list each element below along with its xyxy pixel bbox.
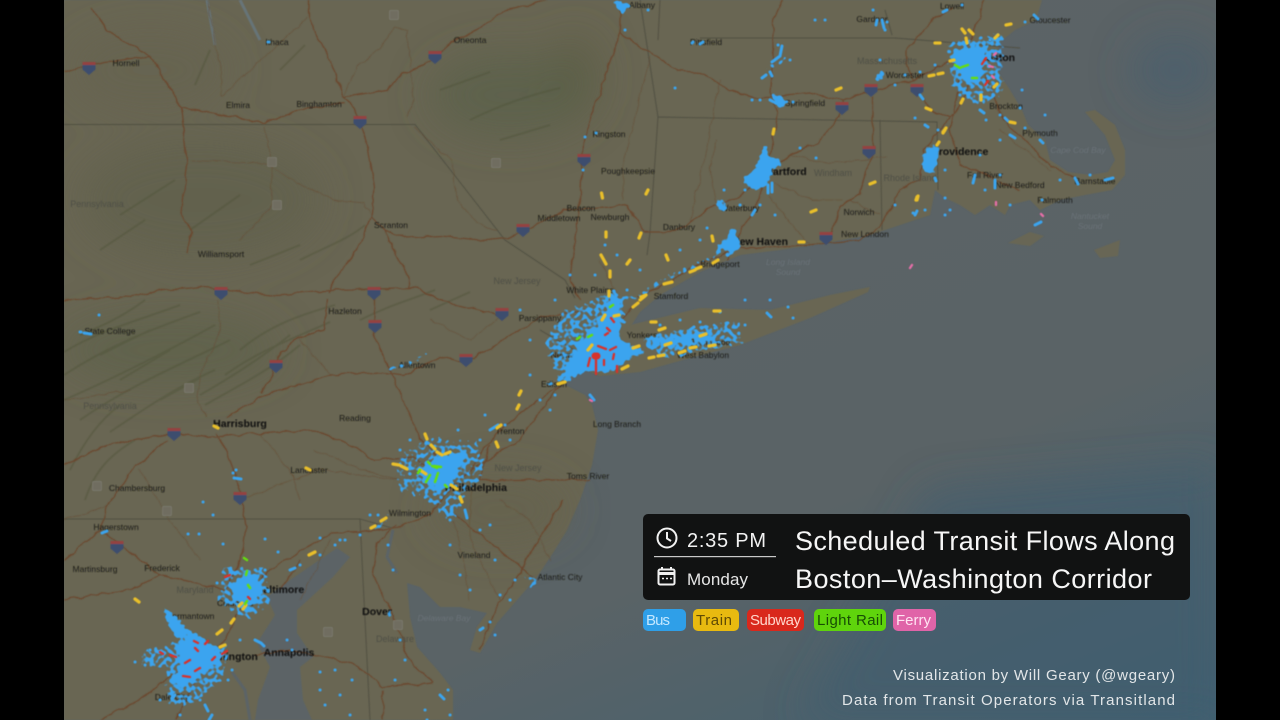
state borders — [64, 0, 1020, 720]
day of week: Monday — [687, 570, 748, 589]
map place labels: New Jersey — [494, 463, 542, 473]
map place labels: Hazleton — [328, 306, 362, 316]
bus: New York metro core — [567, 287, 660, 380]
map place labels: Scranton — [374, 220, 408, 230]
map place labels: Philadelphia — [445, 482, 507, 494]
major highways — [64, 0, 1075, 720]
map place labels: Albany — [629, 0, 656, 10]
map place labels: Plymouth — [1022, 128, 1058, 138]
map place labels: State College — [84, 326, 136, 336]
map place labels: Atlantic City — [538, 572, 583, 582]
title: Boston–Washington Corridor — [795, 564, 1152, 594]
bus: Baltimore — [233, 573, 263, 610]
map place labels: New Bedford — [995, 180, 1045, 190]
Martha's Vineyard and Nantucket — [1008, 232, 1120, 258]
map place labels: Kingston — [592, 129, 626, 139]
credits — [842, 667, 1175, 709]
map place labels: Chambersburg — [109, 483, 165, 493]
map place labels: Binghamton — [296, 99, 342, 109]
map place labels: Hornell — [113, 58, 140, 68]
map place labels: Ithaca — [265, 37, 289, 47]
map place labels: Massachusetts — [857, 56, 918, 66]
map place labels: Newburgh — [591, 212, 630, 222]
bus: Washington — [175, 630, 220, 687]
map place labels: New Jersey — [493, 276, 541, 286]
map place labels: Beacon — [567, 203, 596, 213]
map place labels: Delaware Bay — [418, 613, 471, 623]
map place labels: Martinsburg — [73, 564, 118, 574]
map place labels: Newark — [551, 350, 580, 360]
legend — [643, 609, 936, 631]
legend: bus — [643, 609, 686, 631]
icon: calendar — [658, 567, 675, 584]
map place labels — [70, 0, 1116, 702]
title: Scheduled Transit Flows Along — [795, 526, 1175, 556]
legend: train: Train — [696, 612, 732, 629]
map place labels: Barnstable — [1075, 176, 1116, 186]
map place labels: Pennsylvania — [70, 199, 124, 209]
map place labels: Rhode Island — [883, 173, 937, 183]
train flows — [135, 24, 1015, 647]
map place labels: Maryland — [176, 585, 214, 595]
subway flows — [160, 58, 988, 677]
map place labels: Providence — [932, 146, 988, 158]
map place labels: Cape Cod Bay — [1050, 145, 1106, 155]
ferry flows — [590, 53, 1043, 401]
divider — [654, 556, 776, 557]
map place labels: Toms River — [567, 471, 609, 481]
map place labels: Pennsylvania — [83, 401, 137, 411]
terrain shading — [123, 42, 590, 360]
map place labels: Middletown — [538, 213, 581, 223]
map place labels: Long Branch — [593, 419, 641, 429]
map place labels: Gloucester — [1029, 15, 1071, 25]
map place labels: West Babylon — [677, 350, 729, 360]
map place labels: Dover — [362, 606, 392, 618]
bus: Albany — [612, 0, 631, 14]
map place labels: Baltimore — [256, 584, 304, 596]
map place labels: Edison — [541, 379, 567, 389]
map place labels: Harrisburg — [213, 418, 267, 430]
map place labels: Norwich — [844, 207, 875, 217]
map place labels: Windham — [814, 168, 852, 178]
map place labels: Williamsport — [198, 249, 245, 259]
bus: Providence — [922, 143, 940, 173]
legend: ferry — [893, 609, 936, 631]
map place labels: White Plains — [566, 285, 614, 295]
map place labels: Sound — [1078, 221, 1103, 231]
map place labels: Frederick — [144, 563, 180, 573]
bus: Philadelphia — [420, 453, 467, 490]
bus: Waterbury — [716, 199, 728, 212]
panel background — [643, 514, 1190, 600]
interstate and route shields — [82, 10, 924, 636]
map place labels: Vineland — [458, 550, 491, 560]
map place labels: Hartford — [765, 166, 807, 178]
road network — [64, 0, 1075, 720]
icon: clock — [658, 528, 676, 548]
legend: bus: Bus — [646, 612, 670, 629]
bus: New Haven — [716, 228, 742, 258]
map place labels: Lowell — [940, 1, 964, 11]
time: 2:35 PM — [687, 530, 766, 552]
map place labels: Nantucket — [1071, 211, 1110, 221]
map place labels: Trenton — [496, 426, 525, 436]
bus: Hartford — [743, 145, 782, 191]
map place labels: Boston — [979, 52, 1015, 64]
map place labels: Columbia — [217, 598, 253, 608]
map place labels: Dale City — [155, 692, 190, 702]
bus: Connecticut and Long Island corridors — [370, 57, 787, 620]
map place labels: Bridgeport — [700, 259, 740, 269]
legend: light rail: Light Rail — [817, 612, 883, 629]
legend: ferry: Ferry — [896, 612, 932, 629]
map place labels: Fall River — [967, 170, 1003, 180]
map place labels: Worcester — [886, 70, 924, 80]
map place labels: Annapolis — [264, 647, 315, 659]
legend: subway — [747, 609, 804, 631]
light rail flows — [244, 65, 977, 604]
map place labels: Brockton — [989, 101, 1023, 111]
map place labels: Allentown — [399, 360, 436, 370]
bus: Worcester — [874, 70, 885, 82]
map place labels: Lancaster — [290, 465, 328, 475]
legend: subway: Subway — [750, 612, 802, 629]
map place labels: Waterbury — [721, 203, 760, 213]
map place labels: Springfield — [785, 98, 825, 108]
map place labels: New London — [841, 229, 889, 239]
credits: Data from Transit Operators via Transitland — [842, 692, 1175, 709]
Chesapeake Bay and rivers — [207, 0, 397, 720]
deep water shading — [850, 42, 1208, 684]
map place labels: Stamford — [654, 291, 689, 301]
map place labels: New Haven — [732, 236, 788, 248]
map place labels: Wilmington — [389, 508, 431, 518]
Appalachian ridges — [64, 45, 560, 500]
bus: Springfield — [771, 93, 789, 108]
map place labels: Danbury — [663, 222, 696, 232]
title — [795, 526, 1175, 594]
map place labels: Oneonta — [454, 35, 487, 45]
map place labels: Washington — [198, 651, 258, 663]
title panel — [643, 514, 1190, 600]
map place labels: Falmouth — [1037, 195, 1073, 205]
map place labels: Gardner — [856, 14, 888, 24]
map place labels: Reading — [339, 413, 371, 423]
legend: train — [693, 609, 739, 631]
map place labels: Hagerstown — [93, 522, 139, 532]
map place labels: Brentwood — [690, 337, 731, 347]
minor roads — [64, 0, 1050, 600]
map place labels: Long Island — [766, 257, 810, 267]
bus: New York and New Jersey halo — [544, 288, 626, 382]
credits: Visualization by Will Geary (@wgeary) — [893, 667, 1175, 684]
map place labels: Elmira — [226, 100, 250, 110]
map place labels: Sound — [776, 267, 801, 277]
map place labels: Poughkeepsie — [601, 166, 655, 176]
map place labels: Pittsfield — [690, 37, 722, 47]
bus: dense metro areas and scattered stops — [138, 0, 1005, 710]
map place labels: Delaware — [376, 634, 414, 644]
Long Island — [590, 287, 870, 376]
map place labels: Germantown — [166, 611, 215, 621]
map place labels: Parsippany — [519, 313, 562, 323]
map place labels: Yonkers — [627, 330, 657, 340]
bus: Boston — [953, 48, 987, 80]
